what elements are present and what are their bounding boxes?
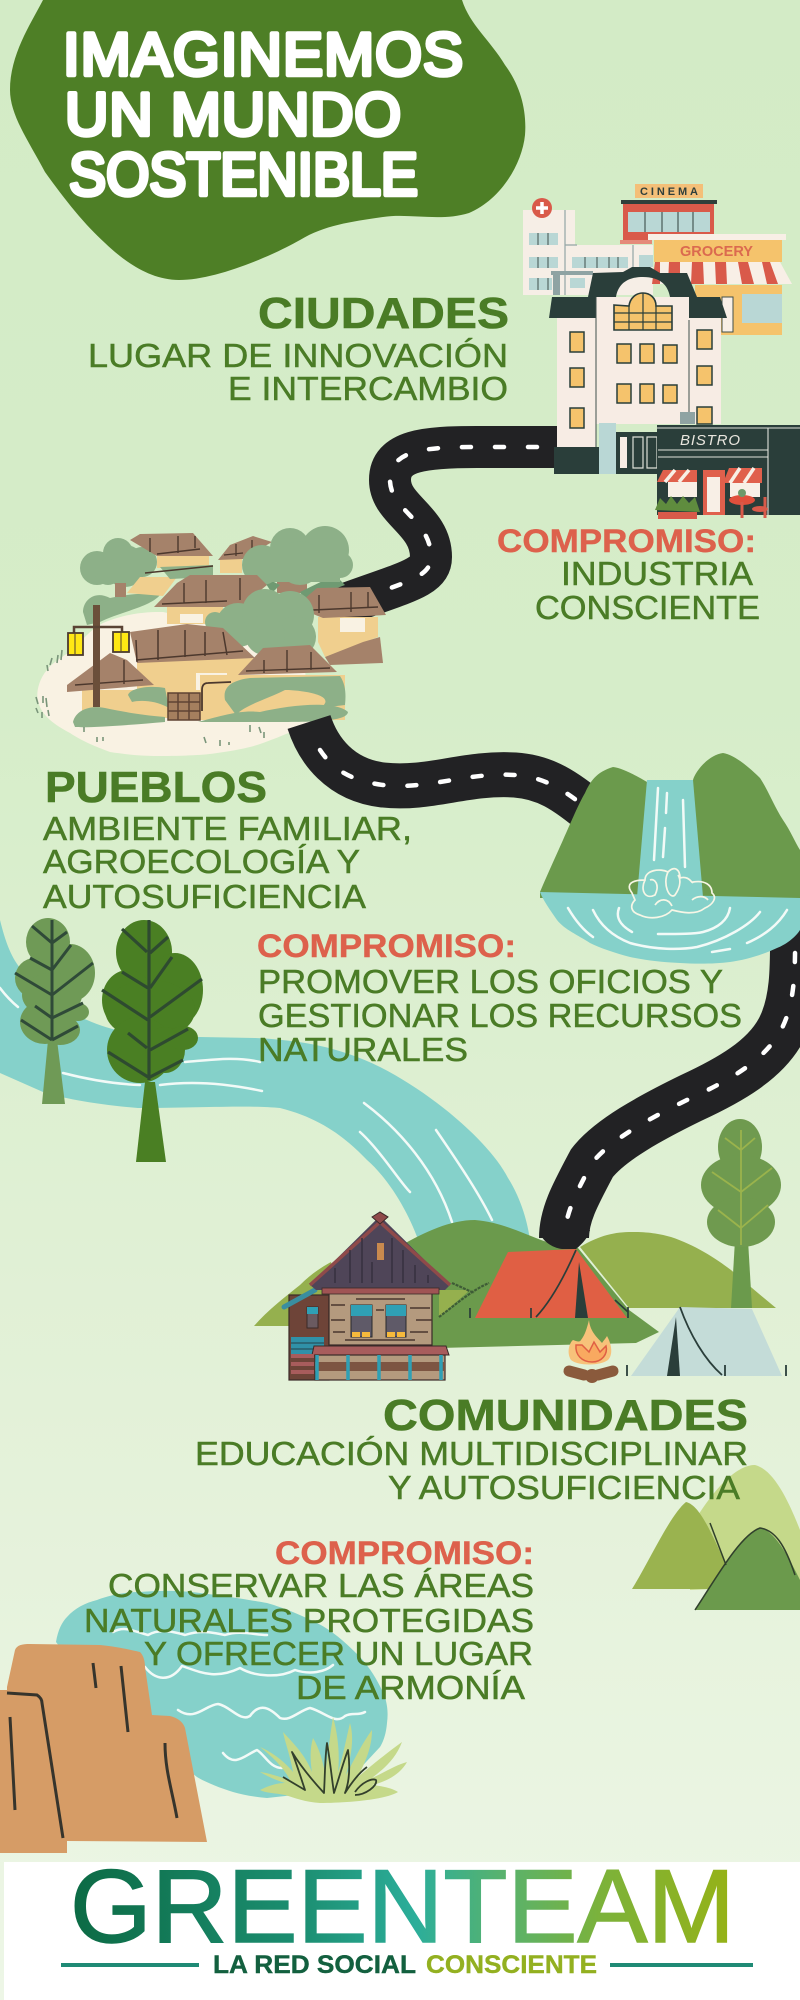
house D	[303, 587, 386, 665]
compromiso: areas naturales: COMPROMISO:	[275, 1535, 534, 1571]
grocery	[648, 234, 792, 335]
city illustration	[523, 184, 800, 519]
bushes	[73, 676, 348, 727]
compromiso: oficios: PROMOVER LOS OFICIOS Y	[258, 963, 723, 1000]
title blob	[10, 0, 525, 280]
road: waterfall to camp	[564, 920, 795, 1245]
left tree cluster	[80, 538, 160, 625]
title	[63, 21, 463, 208]
compromiso: industria: COMPROMISO:	[497, 523, 756, 559]
tagline: LA RED SOCIAL	[213, 1951, 416, 1979]
compromiso: industria: CONSCIENTE	[535, 589, 760, 626]
compromiso: areas naturales: DE ARMONÍA	[296, 1669, 525, 1706]
section: pueblos: AMBIENTE FAMILIAR,	[43, 810, 412, 847]
house G	[238, 645, 337, 675]
section: pueblos	[43, 763, 412, 915]
village illustration	[36, 526, 386, 756]
title: UN MUNDO	[65, 81, 401, 148]
house B	[218, 536, 272, 573]
section: ciudades: LUGAR DE INNOVACIÓN	[88, 337, 508, 374]
compromiso: areas naturales: Y OFRECER UN LUGAR	[144, 1635, 533, 1672]
logo wordmark: GREENTEAM	[70, 1849, 735, 1965]
compromiso: oficios: NATURALES	[258, 1031, 468, 1068]
compromiso: areas naturales: CONSERVAR LAS ÁREAS	[108, 1567, 534, 1604]
house E	[130, 624, 255, 663]
compromiso: areas naturales: NATURALES PROTEGIDAS	[84, 1602, 534, 1639]
tagline accent: CONSCIENTE	[426, 1951, 597, 1979]
gate	[168, 693, 200, 720]
grocery: GROCERY	[680, 243, 753, 260]
compromiso: oficios: COMPROMISO:	[257, 928, 516, 964]
house F	[67, 653, 154, 692]
village ground	[37, 612, 313, 756]
section: comunidades	[195, 1391, 748, 1506]
section: pueblos: AGROECOLOGÍA Y	[43, 843, 360, 880]
mountains	[540, 753, 800, 898]
section: ciudades: CIUDADES	[258, 289, 509, 338]
bistro: BISTRO	[680, 432, 740, 449]
water lines	[568, 788, 787, 952]
house walls front	[82, 658, 255, 718]
house A	[127, 533, 213, 596]
bistro	[655, 425, 800, 519]
mountains bottom right	[632, 1465, 800, 1610]
foam	[629, 869, 714, 918]
road: village to waterfall	[309, 722, 595, 815]
road end over hills	[540, 1230, 590, 1249]
cinema: CINEMA	[640, 186, 698, 198]
rock formation	[0, 1644, 207, 1853]
section: comunidades: COMUNIDADES	[383, 1391, 748, 1440]
main building	[549, 267, 727, 474]
street lamp	[68, 605, 129, 707]
middle tree	[205, 589, 316, 658]
section: pueblos: PUEBLOS	[45, 763, 267, 812]
pool	[540, 892, 800, 964]
section: pueblos: AUTOSUFICIENCIA	[43, 878, 366, 915]
section: comunidades: Y AUTOSUFICIENCIA	[388, 1469, 740, 1506]
compromiso: oficios	[257, 928, 742, 1068]
tree: right	[701, 1119, 781, 1308]
house C	[154, 575, 267, 624]
section: ciudades: E INTERCAMBIO	[228, 370, 508, 407]
compromiso: oficios: GESTIONAR LOS RECURSOS	[258, 997, 742, 1034]
tree: left small	[15, 918, 95, 1104]
back right tree	[242, 526, 353, 600]
hospital	[523, 198, 653, 295]
tree: left large	[102, 920, 203, 1162]
title: SOSTENIBLE	[69, 141, 418, 208]
section: comunidades: EDUCACIÓN MULTIDISCIPLINAR	[195, 1435, 748, 1472]
compromiso: industria	[497, 523, 760, 626]
red tent	[470, 1249, 628, 1318]
cabin body	[329, 1293, 432, 1345]
lake	[56, 1591, 388, 1798]
cabin	[284, 1212, 450, 1380]
river	[0, 920, 530, 1245]
gray tent	[627, 1307, 786, 1376]
camp hills	[254, 1220, 776, 1348]
footer: greenteam logo	[4, 1849, 800, 2000]
road: city to village	[340, 447, 570, 606]
grass tuft	[260, 1717, 407, 1803]
waterfall illustration	[540, 753, 800, 964]
campfire	[569, 1320, 613, 1383]
gable	[310, 1216, 450, 1290]
section: ciudades	[88, 289, 509, 407]
title: IMAGINEMOS	[63, 21, 463, 88]
compromiso: areas naturales	[84, 1535, 534, 1706]
compromiso: industria: INDUSTRIA	[561, 555, 753, 592]
cinema	[620, 184, 717, 244]
